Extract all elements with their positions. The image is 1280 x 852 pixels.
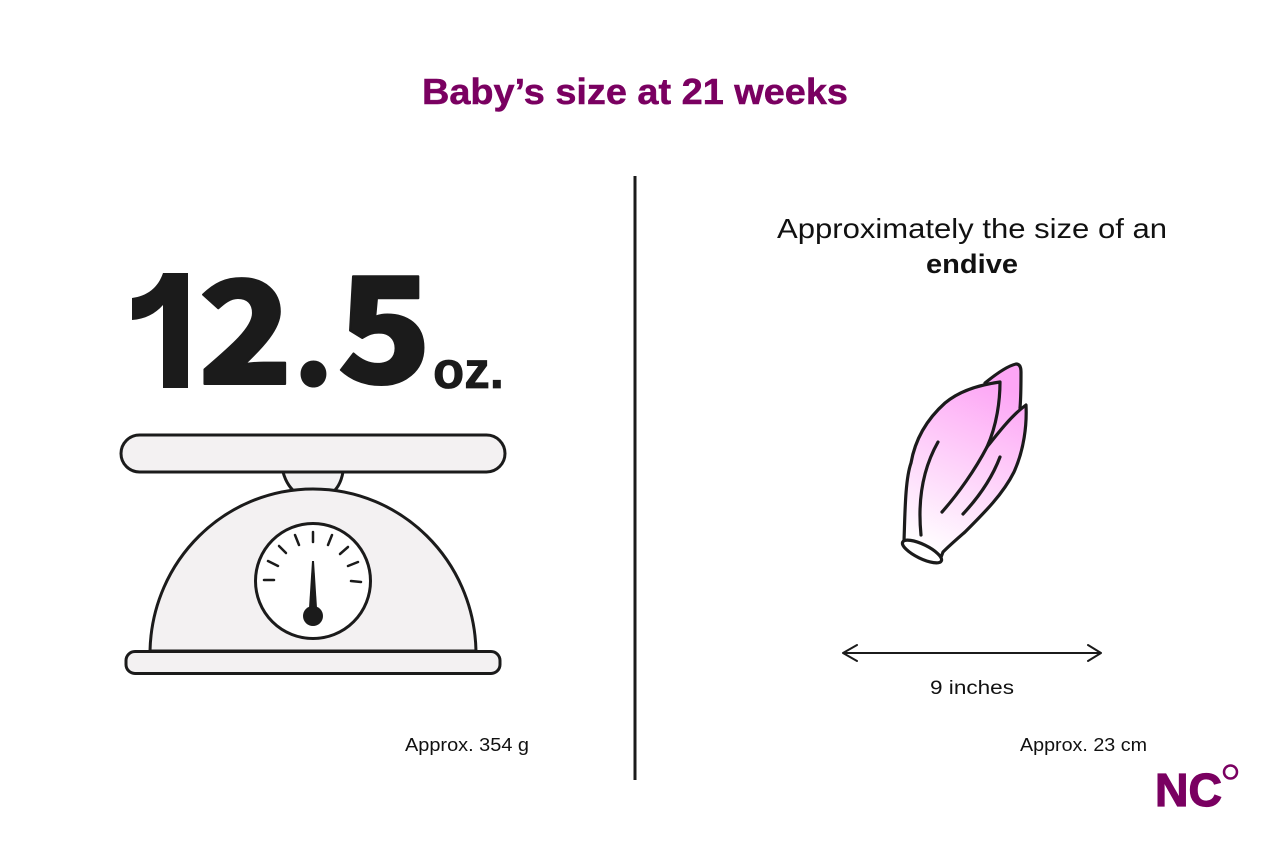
length label: 9 inches <box>930 678 1014 699</box>
weight value: 2 <box>198 219 293 426</box>
icon: kitchen scale <box>121 435 505 674</box>
logo: NC <box>1155 764 1222 816</box>
scale tray <box>121 435 505 472</box>
scale body <box>150 489 476 651</box>
weight metric label: Approx. 354 g <box>405 735 529 755</box>
weight value: 1 <box>124 215 208 428</box>
endive fill <box>902 364 1026 562</box>
length metric label: Approx. 23 cm <box>1020 735 1147 755</box>
comparison text: Approximately the size of an <box>777 213 1167 244</box>
comparison text <box>777 213 1167 279</box>
main leaf <box>904 382 1000 541</box>
leaf veins <box>920 442 1000 535</box>
icon: endive <box>900 364 1026 567</box>
comparison text: endive <box>926 249 1018 279</box>
title: Baby’s size at 21 weeks <box>422 71 848 112</box>
back leaf <box>985 364 1021 408</box>
weight value <box>118 213 432 428</box>
weight value: . <box>292 245 335 422</box>
endive base <box>900 536 944 567</box>
scale neck <box>283 472 343 494</box>
weight value: 5 <box>337 213 432 426</box>
right leaf <box>940 405 1026 560</box>
scale base <box>126 652 500 674</box>
scale dial <box>256 524 370 638</box>
weight unit: oz. <box>433 342 504 400</box>
arrow: length <box>843 645 1101 661</box>
